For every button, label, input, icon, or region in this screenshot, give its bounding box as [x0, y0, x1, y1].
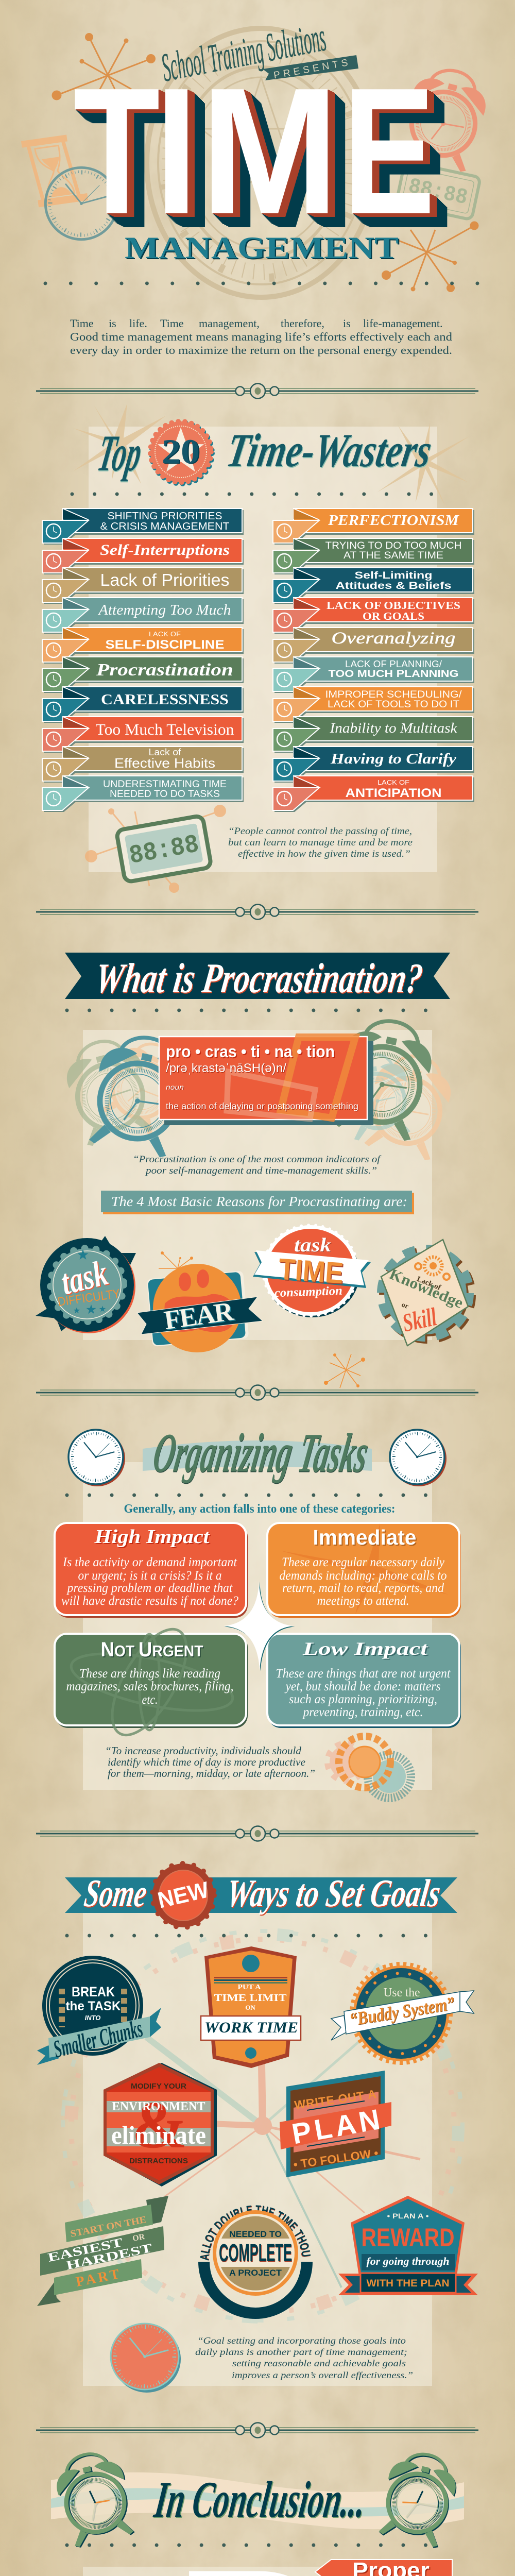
section: in conclusion: [38, 2446, 479, 2576]
clock left: [68, 1430, 125, 1486]
icon: digital clock: [116, 816, 212, 883]
quote: improves a person’s overall effectiveness.”: [232, 2370, 413, 2380]
card: immediate: meetings to attend.: [317, 1594, 409, 1608]
badge: put a time limit on work time: TIME LIMIT: [214, 1992, 287, 2004]
ribbon: lack of objectives: LACK OF OBJECTIVES: [327, 599, 460, 612]
ribbon: trying to do too much: TRYING TO DO TOO MUCH: [325, 540, 461, 551]
background clock rays and ticks: [63, 1931, 462, 2320]
reasons banner: The 4 Most Basic Reasons for Procrastinating are:: [111, 1194, 407, 1209]
intro paragraph: is: [109, 317, 116, 330]
divider: [36, 383, 478, 399]
quote: but can learn to manage time and be more: [228, 838, 413, 848]
icon: sparkle: [224, 1581, 295, 1671]
badge: break the task into smaller chunks: BREAK: [72, 1984, 115, 1999]
quote: [195, 2335, 413, 2380]
dot row: [45, 281, 477, 285]
ribbon: shifting priorities: SHIFTING PRIORITIES: [107, 511, 222, 522]
time-waster list left: [42, 509, 244, 812]
badge: put a time limit on work time: WORK TIME: [204, 2019, 298, 2036]
starburst behind digital clock: [85, 805, 226, 893]
card: high impact: [55, 1523, 248, 1618]
quote: [228, 826, 413, 859]
heading banner: Ways to Set Goals: [224, 1871, 443, 1915]
badge: allot double the time: NEEDED TO: [229, 2229, 282, 2239]
ribbon: improper scheduling: LACK OF TOOLS TO DO IT: [328, 699, 459, 710]
card: immediate: return, mail to read, reports, and: [282, 1581, 444, 1595]
card: not urgent: NOT URGENT: [101, 1638, 203, 1661]
card: low impact: yet, but should be done: matters: [284, 1680, 441, 1693]
divider: [36, 1826, 478, 1841]
definition box: the action of delaying or postponing something: [166, 1101, 358, 1111]
ribbon: shifting priorities: & CRISIS MANAGEMENT: [100, 521, 230, 532]
badge: put a time limit on work time: PUT A: [238, 1984, 261, 1991]
light panel: [83, 1913, 432, 2386]
quote: “Goal setting and incorporating those goals into: [197, 2335, 406, 2346]
clock right: [390, 1430, 447, 1486]
quote: identify which time of day is more productive: [108, 1756, 305, 1768]
section: what is procrastination: [36, 953, 469, 1388]
icon: red clock: [111, 2324, 181, 2393]
section: top 20 time-wasters: [42, 403, 474, 893]
heading: Top: Top: [94, 425, 146, 482]
title: TIME: I: [155, 50, 198, 251]
card: low impact: preventing, training, etc.: [302, 1705, 423, 1719]
ribbon: lack of anticipation: [273, 776, 474, 812]
definition box: noun: [166, 1083, 184, 1091]
heading: in conclusion: In Conclusion...: [151, 2470, 370, 2528]
quote: poor self-management and time-management skills.”: [145, 1165, 377, 1176]
dot row: [67, 2543, 448, 2547]
definition box: [159, 1037, 373, 1125]
intro paragraph: Good time management means managing life’s efforts effectively each and: [70, 330, 452, 343]
starburst right: [377, 423, 469, 505]
badge: lack of knowledge or skill: Lack of: [416, 1275, 442, 1292]
ribbon: attempting too much: Attempting Too Much: [97, 602, 231, 618]
definition box: /prəˌkrastəˈnāSH(ə)n/: [166, 1061, 286, 1075]
icon: digital clock right: [396, 161, 480, 220]
badge: plan a reward: WITH THE PLAN: [367, 2278, 449, 2289]
badge: modify your environment: &: [132, 2088, 187, 2162]
badge: plan a reward: for going through: [367, 2255, 449, 2267]
starburst top left: [52, 33, 156, 100]
ribbon: inability to multitask: Inability to Multitask: [329, 720, 458, 736]
background ornamental clock: [147, 28, 375, 297]
card: high impact: pressing problem or deadline that: [66, 1581, 233, 1595]
title: MANAGEMENT: MANAGEMENT: [125, 231, 399, 265]
heading: Time-Wasters: Time-Wasters: [223, 425, 436, 477]
card: immediate: Immediate: [313, 1526, 416, 1549]
dot row: [67, 1493, 448, 1497]
ribbon: self-interruptions: [42, 538, 244, 574]
ribbon: shifting priorities: [42, 509, 244, 545]
dot row: [67, 1009, 448, 1012]
ribbon: underestimating time: UNDERESTIMATING TIME: [103, 779, 227, 790]
badge: modify your environment: ENVIRONMENT: [112, 2100, 205, 2113]
ribbon: lack of effective habits: [42, 747, 244, 783]
alarm clock right: [374, 2447, 463, 2550]
title: TIME: E: [343, 51, 435, 252]
badge: break the task into smaller chunks: the TASK: [66, 1999, 121, 2013]
ribbon: lack of priorities: [42, 568, 244, 604]
card: high impact: Is the activity or demand important: [62, 1555, 237, 1569]
card: low impact: These are things that are not urgent: [276, 1667, 451, 1681]
badge: 20: 20: [162, 432, 200, 471]
divider: [36, 905, 478, 919]
hero section: [23, 14, 492, 357]
title: TIME: M: [201, 51, 339, 252]
card: immediate: These are regular necessary daily: [282, 1555, 445, 1569]
badge: use the buddy system: Use the: [383, 1986, 420, 1999]
title: TIME: [73, 50, 435, 252]
title: TIME: T: [73, 50, 160, 251]
heading band: [143, 1440, 372, 1471]
ribbon: lack of self-discipline: SELF-DISCIPLINE: [105, 638, 225, 652]
ribbon: procrastination: Procrastination: [96, 660, 233, 680]
quote: “Procrastination is one of the most common indicators of: [133, 1154, 382, 1165]
badge: start on the easiest or hardest part: PART: [75, 2266, 121, 2290]
ribbon: lack of self-discipline: LACK OF: [149, 630, 181, 638]
quote: “People cannot control the passing of time,: [228, 826, 412, 837]
card: not urgent: magazines, sales brochures, filing,: [66, 1680, 234, 1693]
badge: new: [152, 1863, 214, 1927]
ribbon: overanalyzing: Overanalyzing: [332, 629, 455, 648]
ribbon: having to clarify: Having to Clarify: [330, 751, 456, 767]
ribbon: self-limiting attitudes: Attitudes & Beliefs: [336, 581, 451, 591]
card: high impact: High Impact: [94, 1526, 210, 1548]
badge: modify your environment: [104, 2063, 217, 2187]
ribbon: trying to do too much: AT THE SAME TIME: [344, 550, 443, 561]
definition box: pro • cras • ti • na • tion: [166, 1042, 335, 1061]
card: not urgent: [55, 1618, 248, 1747]
quote: for them—morning, midday, or late afternoon.”: [108, 1767, 315, 1780]
badge: fear: FEAR: [162, 1297, 236, 1335]
ribbon: attempting too much: [42, 598, 244, 634]
ribbon: carelessness: [42, 687, 244, 723]
wavy heading band: [51, 2472, 464, 2529]
icon: alarm clock right: [397, 62, 492, 174]
ribbon: lack of planning: [273, 657, 474, 693]
badge: task time consumption: consumption: [274, 1284, 342, 1300]
heading banner: Some: [82, 1871, 150, 1915]
intro paragraph: life.: [129, 317, 147, 330]
badge: plan a reward: • PLAN A •: [387, 2212, 429, 2220]
badge: put a time limit on work time: [201, 1946, 301, 2068]
badge: plan a reward: REWARD: [362, 2223, 454, 2252]
ribbon: lack of planning: TOO MUCH PLANNING: [329, 669, 458, 680]
badge: modify your environment: MODIFY YOUR: [131, 2082, 186, 2091]
divider: [36, 2422, 478, 2438]
ribbon: too much television: Too Much Television: [96, 720, 234, 738]
ribbon: lack of objectives: OR GOALS: [363, 610, 424, 622]
ribbon: procrastination: [42, 657, 244, 693]
ribbon: lack of priorities: Lack of Priorities: [100, 570, 230, 589]
badge: put a time limit on work time: ON: [245, 2004, 255, 2011]
starburst: [324, 1353, 365, 1388]
time-waster list right: [273, 509, 474, 812]
light panel: [89, 427, 437, 872]
ribbon: lack of planning: LACK OF PLANNING/: [345, 659, 442, 669]
ribbon: lack of self-discipline: [42, 628, 244, 664]
intro paragraph: every day in order to maximize the return on the personal energy expended.: [70, 344, 452, 357]
badge: lack of knowledge or skill: Knowledge: [387, 1265, 466, 1312]
ribbon: lack of anticipation: LACK OF: [377, 778, 409, 786]
badge: task difficulty: [36, 1236, 136, 1333]
intro paragraph: is: [343, 317, 351, 330]
alarm clocks right: [329, 1012, 458, 1162]
badge: start on the easiest or hardest part: HARDEST: [65, 2242, 153, 2273]
badge: write out a plan to follow: PLAN: [289, 2103, 382, 2150]
badge: lack of knowledge or skill: or: [400, 1301, 409, 1311]
quote: daily plans is another part of time management;: [195, 2347, 407, 2357]
icon: digital clock right: 88:88: [406, 174, 470, 210]
badge: lack of knowledge or skill: [381, 1240, 469, 1346]
ribbon: perfectionism: [273, 509, 474, 545]
badge: use the buddy system: [331, 1965, 474, 2061]
card: not urgent: These are things like reading: [79, 1667, 220, 1681]
badge: task difficulty: task: [57, 1253, 112, 1303]
alarm clock left: [50, 2446, 139, 2550]
icon: wall clock left: [45, 167, 117, 240]
badge: allot double the time: ALLOT DOUBLE THE TIME THOUGHT: [200, 2205, 311, 2261]
light panel: [83, 1030, 432, 1340]
section: organizing tasks: [55, 1422, 461, 1798]
badge: task time consumption: task: [294, 1234, 331, 1256]
badge: write out a plan to follow: WRITE OUT A: [294, 2087, 377, 2112]
badge: new: NEW: [156, 1877, 212, 1913]
icon: digital clock: 88:88: [127, 830, 201, 871]
quote: effective in how the given time is used.”: [238, 849, 410, 859]
quote: [105, 1744, 315, 1780]
badge: modify your environment: eliminate: [111, 2121, 206, 2149]
intro paragraph: Time: [70, 317, 94, 330]
card: high impact: will have drastic results if not done?: [61, 1594, 238, 1608]
subheading: Generally, any action falls into one of these categories:: [124, 1502, 396, 1516]
badge: write out a plan to follow: [280, 2071, 391, 2177]
badge: write out a plan to follow: • TO FOLLOW •: [293, 2146, 379, 2171]
badge: lack of knowledge or skill: Skill: [400, 1302, 439, 1337]
quote: setting reasonable and achievable goals: [232, 2358, 406, 2368]
intro paragraph: [70, 317, 452, 357]
dot row: [67, 1934, 448, 1937]
badge: allot double the time: [198, 2205, 313, 2319]
badge: break the task into smaller chunks: Smaller Chunks: [51, 2015, 145, 2063]
ribbon: too much television: [42, 717, 244, 753]
ribbon: self-limiting attitudes: Self-Limiting: [354, 570, 433, 581]
badge: use the buddy system: “Buddy System”: [348, 1993, 456, 2030]
ribbon: having to clarify: [273, 747, 474, 783]
ribbon: perfectionism: PERFECTIONISM: [328, 513, 459, 529]
starburst lower right: [382, 222, 479, 292]
ribbon: trying to do too much: [273, 538, 474, 574]
icon: sun: [330, 1736, 411, 1798]
intro paragraph: life-management.: [363, 317, 443, 330]
badge: task time consumption: TIME: [278, 1252, 345, 1290]
ribbon: lack of effective habits: Lack of: [148, 747, 182, 757]
badge: fear: [137, 1251, 263, 1352]
light panel: [83, 1462, 432, 1790]
badge: start on the easiest or hardest part: [37, 2196, 168, 2306]
ribbon: improper scheduling: IMPROPER SCHEDULING/: [325, 689, 462, 700]
heading banner: [65, 1871, 457, 1915]
badge: allot double the time: COMPLETE: [219, 2240, 292, 2267]
alarm clocks left: [60, 1029, 194, 1160]
ribbon: underestimating time: NEEDED TO DO TASKS: [110, 789, 220, 800]
card: immediate: demands including: phone calls to: [279, 1569, 447, 1583]
badge: task difficulty: DIFFICULTY: [57, 1286, 121, 1309]
badge: allot double the time: A PROJECT: [229, 2268, 282, 2278]
ribbon: improper scheduling: [273, 687, 474, 723]
intro paragraph: therefore,: [281, 317, 324, 330]
presents banner: PRESENTS: [273, 57, 349, 81]
ribbon: lack of objectives: [273, 598, 474, 634]
ribbon: underestimating time: [42, 776, 244, 812]
badge: break the task into smaller chunks: [37, 1956, 161, 2065]
card: low impact: [267, 1634, 461, 1728]
badge: modify your environment: DISTRACTIONS: [129, 2157, 188, 2165]
card: low impact: such as planning, prioritizing,: [289, 1692, 437, 1706]
reasons banner: [101, 1191, 414, 1214]
badge: task time consumption: [253, 1225, 371, 1317]
icon: hourglass: [23, 134, 87, 207]
quote: [133, 1154, 382, 1176]
ribbon: self-limiting attitudes: [273, 568, 474, 604]
card: not urgent: etc.: [142, 1693, 158, 1707]
badge: start on the easiest or hardest part: OR: [132, 2232, 146, 2243]
card: low impact: Low Impact: [302, 1638, 428, 1659]
starburst left: [73, 403, 166, 484]
card: immediate: [267, 1523, 461, 1618]
ribbon: carelessness: CARELESSNESS: [101, 691, 229, 708]
ribbon: lack of anticipation: ANTICIPATION: [345, 786, 442, 800]
badge: start on the easiest or hardest part: EASIEST: [47, 2236, 124, 2265]
ribbon: inability to multitask: [273, 717, 474, 753]
quote: “To increase productivity, individuals should: [105, 1744, 301, 1757]
tag: proper: [315, 2558, 452, 2576]
divider: [36, 1385, 478, 1400]
light panel: [83, 2567, 432, 2576]
badge: break the task into smaller chunks: INTO: [85, 2014, 100, 2022]
intro paragraph: Time: [160, 317, 184, 330]
badge: plan a reward: [338, 2196, 478, 2295]
badge: start on the easiest or hardest part: START ON THE: [70, 2214, 147, 2240]
badge: 20: [150, 421, 212, 484]
intro paragraph: management,: [199, 317, 260, 330]
ribbon: lack of effective habits: Effective Habits: [114, 755, 215, 771]
card: high impact: or urgent; is it a crisis? Is it a: [78, 1569, 221, 1583]
ribbon: self-interruptions: Self-Interruptions: [100, 541, 230, 558]
dot row: [72, 493, 454, 496]
ribbon: overanalyzing: [273, 628, 474, 664]
